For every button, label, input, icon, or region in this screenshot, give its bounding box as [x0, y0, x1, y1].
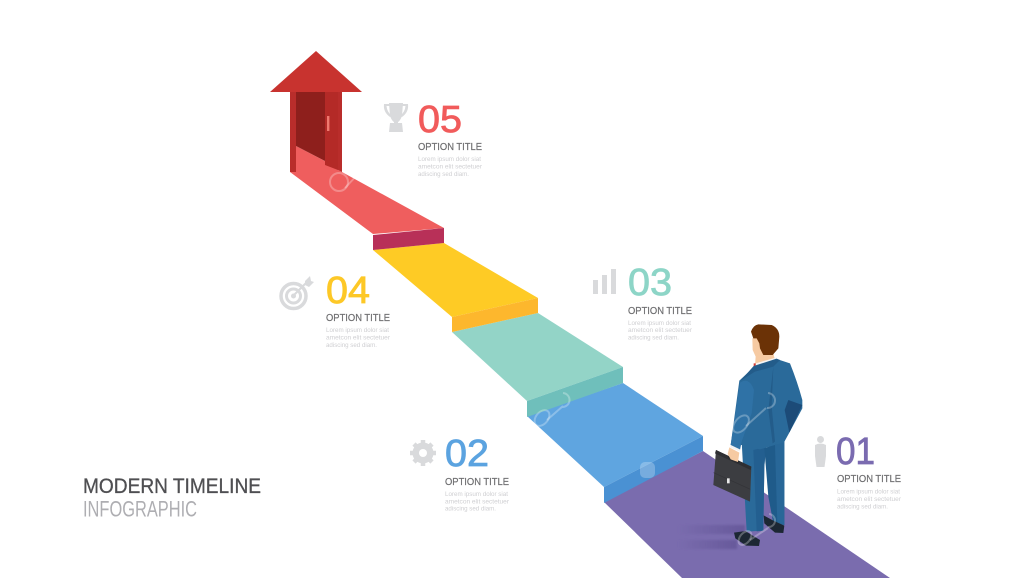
step 3: teal: [452, 313, 623, 417]
body text: Lorem ipsum dolor siat: [418, 156, 481, 163]
watermarks: [330, 172, 775, 547]
option title: OPTION TITLE: [628, 306, 692, 317]
body text: ametcon elit sectetuer: [837, 496, 901, 503]
cuff: [730, 445, 740, 451]
title: INFOGRAPHIC: [83, 496, 197, 522]
option title: OPTION TITLE: [326, 313, 390, 324]
label 04: [281, 270, 390, 349]
icon: bars: [593, 269, 616, 294]
icon: trophy: [384, 103, 408, 132]
option title: OPTION TITLE: [445, 477, 509, 488]
number 05: 05: [418, 99, 462, 141]
step 1: purple path: [604, 451, 890, 578]
neck and face: [752, 335, 775, 365]
jacket shade: [785, 400, 802, 433]
body text: ametcon elit sectetuer: [326, 334, 390, 342]
body text: [445, 491, 509, 512]
collar: [756, 357, 777, 367]
step 4: yellow: [373, 243, 538, 332]
body text: Lorem ipsum dolor siat: [326, 327, 389, 334]
left arm: [731, 381, 754, 450]
number 04: 04: [326, 270, 370, 312]
body text: [418, 156, 482, 178]
businessman: [713, 324, 802, 546]
body text: ametcon elit sectetuer: [445, 498, 509, 506]
icon: person: [815, 436, 826, 467]
step 2: blue: [527, 383, 703, 503]
arrow with door: [270, 51, 362, 172]
body text: ametcon elit sectetuer: [628, 327, 692, 334]
label 03: [593, 262, 692, 342]
label 05: [384, 99, 482, 178]
jacket collar: [741, 359, 780, 381]
body text: Lorem ipsum dolor siat: [445, 491, 508, 498]
jacket: [731, 359, 802, 449]
number 01: 01: [836, 431, 875, 473]
label 01: [815, 431, 901, 510]
number 02: 02: [445, 433, 489, 475]
icon: target: [281, 276, 314, 308]
title: MODERN TIMELINE: [83, 474, 261, 498]
step 5: red: [290, 146, 444, 250]
body text: adiscing sed diam.: [837, 504, 888, 510]
body text: adiscing sed diam.: [418, 171, 469, 178]
label 02: [410, 433, 509, 512]
body text: ametcon elit sectetuer: [418, 164, 482, 170]
body text: adiscing sed diam.: [445, 506, 496, 512]
title: [83, 474, 261, 522]
right leg: [764, 440, 784, 525]
body text: [837, 488, 901, 510]
briefcase: [713, 450, 751, 502]
body text: Lorem ipsum dolor siat: [837, 488, 900, 496]
left leg: [742, 442, 766, 532]
body text: [326, 327, 390, 349]
option title: OPTION TITLE: [418, 142, 482, 153]
body text: adiscing sed diam.: [326, 342, 377, 349]
shoes: [734, 531, 760, 546]
body text: [628, 320, 692, 342]
number 03: 03: [628, 262, 672, 304]
hand: [728, 447, 739, 462]
body text: adiscing sed diam.: [628, 334, 679, 342]
hair: [751, 324, 779, 355]
icon: gear: [410, 440, 436, 466]
man's shadow: [677, 525, 745, 549]
body text: Lorem ipsum dolor siat: [628, 320, 691, 327]
option title: OPTION TITLE: [837, 474, 901, 485]
